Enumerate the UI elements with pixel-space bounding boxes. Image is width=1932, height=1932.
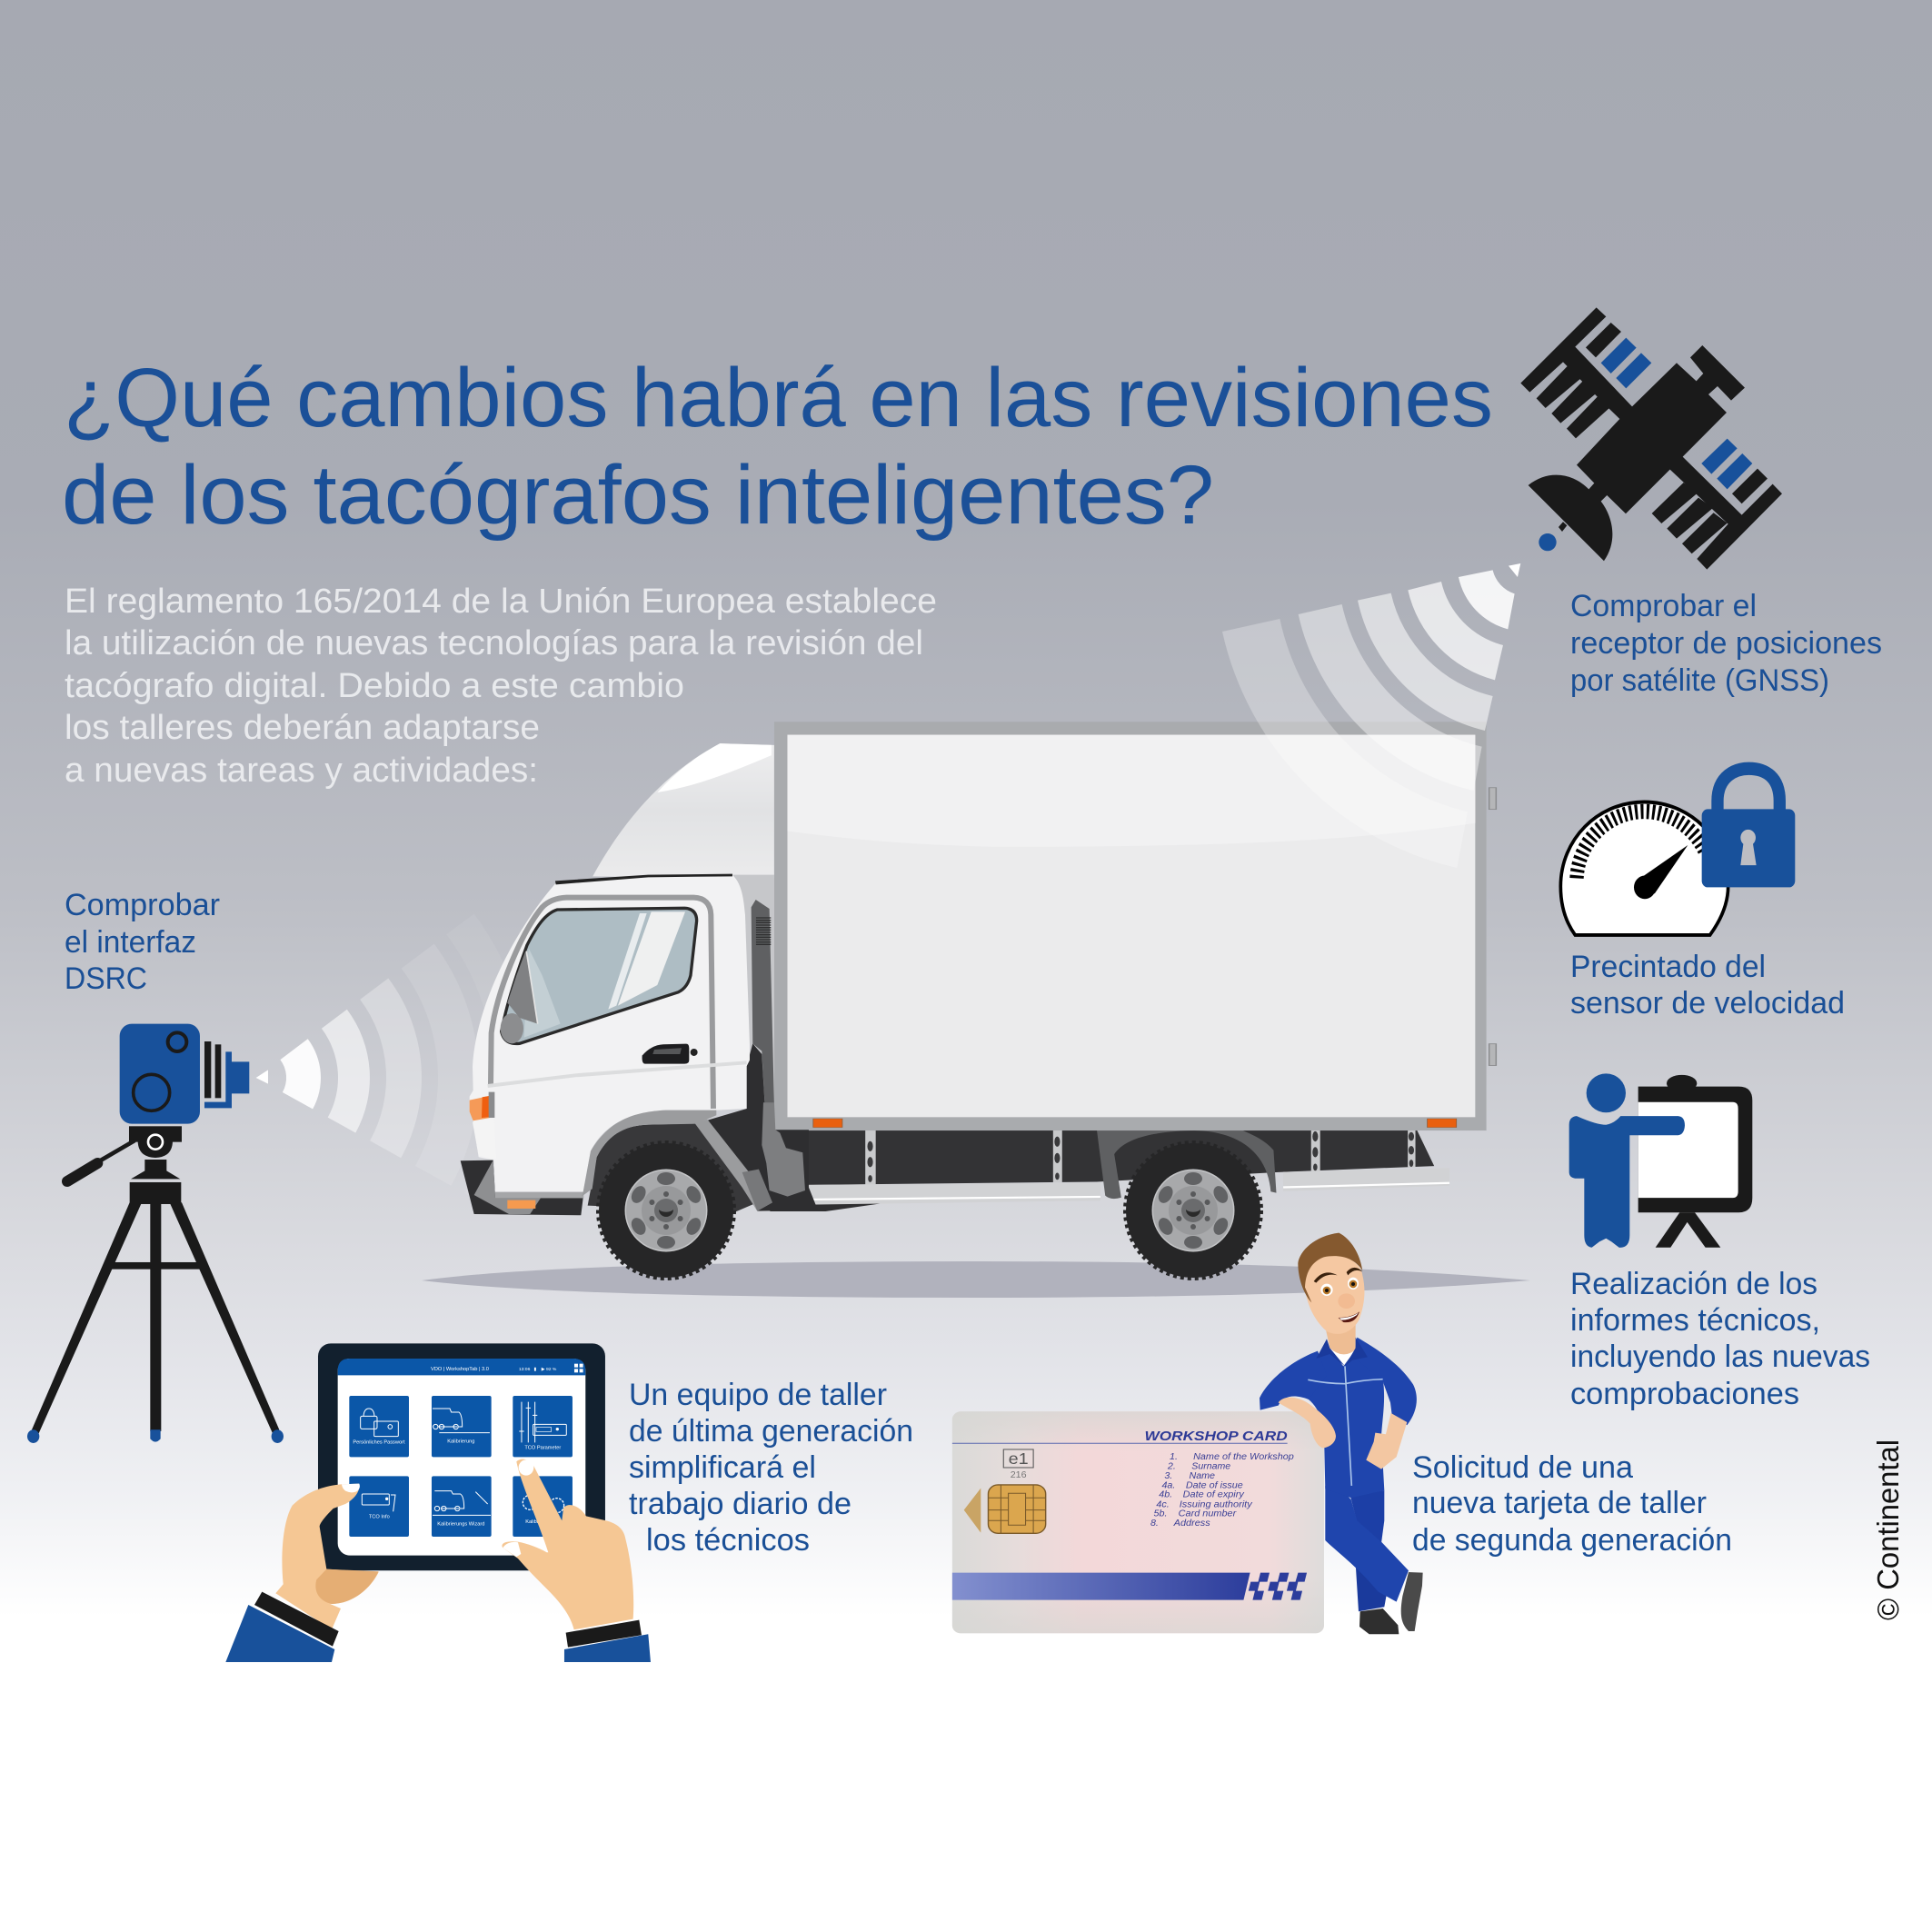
card field list	[1150, 1452, 1294, 1529]
copyright: © Continental	[1871, 1439, 1905, 1620]
cab	[461, 874, 818, 1215]
label: workshop equipment: simplificará el	[629, 1450, 816, 1485]
label: speed sensor	[1570, 950, 1845, 1021]
label: technical reports: comprobaciones	[1570, 1377, 1799, 1411]
label: GNSS: receptor de posiciones	[1570, 626, 1882, 661]
tile: TCO Info	[349, 1476, 409, 1537]
icon: presenter	[1569, 1073, 1752, 1248]
icon: speedometer and padlock	[1560, 769, 1795, 935]
label: GNSS: Comprobar el	[1570, 589, 1757, 623]
label: speed sensor: Precintado del	[1570, 950, 1766, 984]
tile: Persönliches Passwort	[349, 1396, 409, 1457]
label: DSRC: Comprobar	[65, 888, 220, 922]
left hand	[225, 1484, 379, 1662]
label: technical reports: informes técnicos,	[1570, 1303, 1820, 1338]
label: technical reports: incluyendo las nuevas	[1570, 1339, 1870, 1374]
card field list: Card number	[1179, 1509, 1237, 1519]
tile: Kalibrierung: Kalibrierung	[447, 1439, 474, 1445]
label: new workshop card	[1412, 1450, 1732, 1558]
tile: TCO Parameter: TCO Parameter	[524, 1445, 561, 1450]
label: DSRC: DSRC	[65, 961, 147, 996]
right hand	[502, 1459, 651, 1662]
truck	[461, 722, 1496, 1279]
satellite signal waves	[1222, 563, 1520, 868]
front fender	[582, 1110, 772, 1211]
rear cab column and dark frame	[588, 900, 818, 1211]
truck shadow	[422, 1261, 1530, 1298]
label: workshop equipment: de última generación	[629, 1414, 913, 1449]
tablet screen: 13:06 ▮ ▶ 92 %	[519, 1367, 557, 1372]
label: new workshop card: de segunda generación	[1412, 1523, 1732, 1558]
bumper	[461, 1160, 583, 1215]
chassis	[770, 1130, 1449, 1211]
window	[501, 908, 697, 1043]
card field list: Address	[1173, 1519, 1210, 1529]
tile: Kalibrierung	[432, 1396, 492, 1457]
card field list: Surname	[1191, 1462, 1230, 1472]
tile: Kalibrierungs Wizard: Kalibrierungs Wizard	[437, 1521, 484, 1527]
label: GNSS	[1570, 589, 1882, 698]
title	[62, 352, 1493, 542]
icon: satellite	[1520, 307, 1782, 570]
intro text: El reglamento 165/2014 de la Unión Europea establece	[65, 583, 937, 621]
label: new workshop card: nueva tarjeta de taller	[1412, 1486, 1707, 1520]
label: GNSS: por satélite (GNSS)	[1570, 663, 1829, 698]
label: new workshop card: Solicitud de una	[1412, 1450, 1633, 1485]
tablet with hands	[225, 1343, 651, 1662]
label: workshop equipment: Un equipo de taller	[629, 1378, 887, 1412]
tile: TCO Parameter	[513, 1396, 573, 1457]
area behind cab	[733, 875, 774, 1130]
workshop card: WORKSHOP CARD	[1145, 1429, 1288, 1444]
cab body	[470, 875, 750, 1192]
tile: Kalibrierung settings: Kalibrierung	[525, 1519, 553, 1525]
card field list: 2.	[1167, 1462, 1176, 1472]
title: de los tacógrafos inteligentes?	[62, 449, 1214, 542]
tile: Kalibrierung settings	[513, 1476, 573, 1537]
card field list: 4c.	[1156, 1500, 1170, 1509]
label: speed sensor: sensor de velocidad	[1570, 986, 1845, 1021]
card field list: 5b.	[1154, 1509, 1167, 1519]
rear wheel	[1125, 1142, 1261, 1279]
card field list: Date of expiry	[1183, 1490, 1245, 1500]
cargo box	[774, 722, 1496, 1130]
workshop card: e1	[1009, 1450, 1029, 1468]
card field list: 4a.	[1161, 1481, 1175, 1490]
label: technical reports	[1570, 1267, 1870, 1411]
title: ¿Qué cambios habrá en las revisiones	[64, 352, 1493, 444]
card field list: Issuing authority	[1180, 1500, 1253, 1509]
card field list: Date of issue	[1186, 1481, 1243, 1490]
intro text: la utilización de nuevas tecnologías para la revisión del	[65, 624, 923, 662]
intro text: los talleres deberán adaptarse	[65, 709, 540, 747]
door handle	[642, 1044, 698, 1064]
headlight	[470, 1092, 496, 1159]
icon: DSRC camera on tripod	[27, 1024, 284, 1443]
card field list: 4b.	[1159, 1490, 1172, 1500]
front wheel	[598, 1142, 734, 1279]
tablet screen: VDO | WorkshopTab | 3.0	[431, 1367, 489, 1372]
card field list: Name	[1189, 1471, 1215, 1481]
DSRC signal waves	[280, 914, 529, 1210]
workshop card	[952, 1411, 1324, 1633]
label: workshop equipment	[629, 1378, 913, 1558]
tile: Kalibrierungs Wizard	[432, 1476, 492, 1537]
label: DSRC	[65, 888, 220, 996]
card field list: Name of the Workshop	[1193, 1452, 1294, 1462]
roof strip	[555, 874, 732, 884]
tile: TCO Info: TCO Info	[369, 1515, 390, 1520]
door frame	[491, 898, 713, 1109]
card field list: 8.	[1150, 1519, 1159, 1529]
step	[762, 1102, 805, 1197]
label: workshop equipment: trabajo diario de	[629, 1487, 851, 1521]
tile: Persönliches Passwort: Persönliches Passwort	[353, 1439, 405, 1445]
label: workshop equipment: los técnicos	[646, 1523, 810, 1558]
card field list: 3.	[1164, 1471, 1172, 1481]
intro text: a nuevas tareas y actividades:	[65, 752, 538, 790]
cab wind deflector	[593, 743, 774, 878]
intro text: tacógrafo digital. Debido a este cambio	[65, 667, 684, 705]
label: DSRC: el interfaz	[65, 925, 196, 960]
card field list: 1.	[1170, 1452, 1178, 1462]
intro text	[65, 583, 937, 790]
mechanic character	[1260, 1233, 1423, 1634]
workshop card: 216	[1011, 1470, 1027, 1480]
tablet screen	[338, 1359, 585, 1556]
label: technical reports: Realización de los	[1570, 1267, 1817, 1301]
tablet frame	[318, 1343, 605, 1570]
